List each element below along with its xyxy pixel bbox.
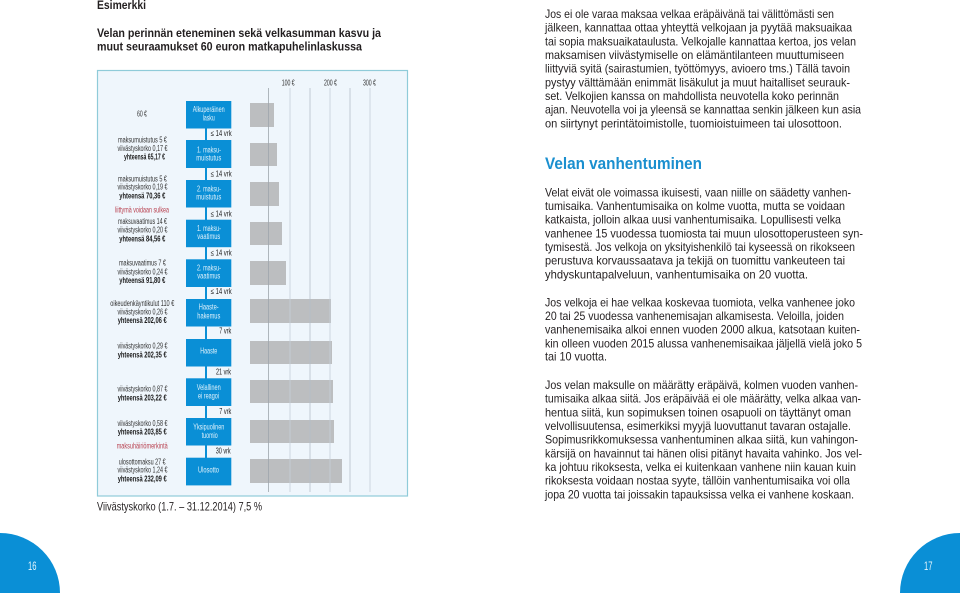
text block: start of limitation period: hentua siitä, kun sopimuksen toinen osapuoli on täyttänyt oman <box>545 405 851 419</box>
chart grid lines <box>268 88 370 492</box>
text block: limitation periods: vanhenee 15 vuodessa tuomiosta tai muun ulosottoperusteen syn- <box>545 226 863 240</box>
time interval labels: 21 vrk <box>216 367 232 376</box>
text block: limitation periods: Velat eivät ole voimassa ikuisesti, vaan niille on säädetty vanhen- <box>545 185 851 199</box>
text block: limitation periods: tumisaika. Vanhentumisaika on kolme vuotta, mutta se voidaan <box>545 199 845 213</box>
cost breakdown labels: oikeudenkäyntikulut 110 € <box>110 299 175 308</box>
time interval labels: ≤ 14 vrk <box>211 129 232 138</box>
text block: start of limitation period <box>544 378 862 501</box>
process step labels: vaatimus <box>197 232 220 241</box>
text block: intro paragraph: jälkeen, kannattaa ottaa yhteyttä velkojaan ja pyytää maksuaikaa <box>544 21 852 35</box>
page number badge: 17: 17 <box>924 561 932 573</box>
cost breakdown labels: maksumuistutus 5 € <box>118 136 167 145</box>
text block: start of limitation period: Sopimusrikkomuksessa vanhentuminen alkaa siitä, kun vahingon- <box>545 433 858 447</box>
text block: intro paragraph: tai sopia maksuaikataulusta. Velkojalle kannattaa kertoa, jos velan <box>545 34 856 48</box>
footnote: interest rate: Viivästyskorko (1.7. – 31.12.2014) 7,5 % <box>97 500 262 514</box>
cost breakdown labels: yhteensä 202,35 € <box>118 350 167 359</box>
page number badge: 16 <box>0 533 60 593</box>
cost breakdown labels: liittymä voidaan sulkea <box>115 206 169 215</box>
bar chart: debt amount per step <box>250 103 342 483</box>
cost breakdown labels: viivästyskorko 1,24 € <box>118 466 168 475</box>
cost breakdown labels: viivästyskorko 0,19 € <box>118 183 168 192</box>
text block: start of limitation period: ka johtuu rikoksesta, velka ei kuitenkaan vanhene niin kauan kuin <box>545 460 856 474</box>
cost breakdown labels: maksuhäiriömerkintä <box>117 442 168 451</box>
text block: start of limitation period: Jos velan maksulle on määrätty eräpäivä, kolmen vuoden vanhen- <box>545 378 858 392</box>
axis labels: 300 € <box>363 79 376 88</box>
process step labels: Haaste- <box>199 302 219 311</box>
text block: judgment limitation: kin olleen vuoden 2015 alussa vanhenemisaikaa jäljellä vielä joko 5 <box>545 336 862 350</box>
time interval labels <box>211 129 232 456</box>
time interval labels: 7 vrk <box>219 327 232 336</box>
cost breakdown labels: yhteensä 65,17 € <box>124 152 165 162</box>
cost breakdown labels: 60 € <box>137 110 147 119</box>
text block: judgment limitation <box>545 296 862 364</box>
process step labels: 1. maksu- <box>197 224 221 233</box>
process step labels: 1. maksu- <box>197 145 221 154</box>
connector line between process steps <box>205 128 207 458</box>
cost breakdown labels: viivästyskorko 0,29 € <box>118 342 168 351</box>
text block: judgment limitation: vanhenemisaika alkoi ennen vuoden 2000 alkua, katsotaan kuiten- <box>545 323 860 337</box>
cost breakdown labels: yhteensä 203,22 € <box>118 393 167 402</box>
process step labels: tuomio <box>202 431 218 440</box>
text block: intro paragraph: ajan. Neuvotella voi ja yleensä se kannattaa senkin jälkeen kun asia <box>545 103 861 117</box>
text block: judgment limitation: tai 10 vuotta. <box>545 350 607 364</box>
text block: intro paragraph: on siirtynyt perintätoimistolle, tuomioistuimeen tai ulosottoon. <box>545 116 842 130</box>
process step labels: 2. maksu- <box>197 184 221 193</box>
cost breakdown labels <box>110 110 175 483</box>
heading: Velan vanhentuminen: Velan vanhentuminen <box>545 154 702 173</box>
cost breakdown labels: viivästyskorko 0,20 € <box>118 226 168 235</box>
text block: judgment limitation: 20 tai 25 vuodessa vanhenemisajan alkamisesta. Veloilla, joiden <box>545 309 844 323</box>
text block: intro paragraph: maksamisen viivästymiselle on elämäntilanteen muuttumiseen <box>545 48 844 62</box>
text block: start of limitation period: tumisaika alkaa siitä. Jos eräpäivää ei ole määrätty, velka alkaa van- <box>545 392 861 406</box>
cost breakdown labels: ulosottomaksu 27 € <box>119 457 166 466</box>
time interval labels: ≤ 14 vrk <box>211 249 232 258</box>
panel: debt progression chart <box>98 70 408 496</box>
text block: limitation periods <box>545 185 863 281</box>
time interval labels: 30 vrk <box>216 447 231 456</box>
axis labels: 200 € <box>324 79 337 88</box>
process step labels: 2. maksu- <box>197 264 221 273</box>
time interval labels: ≤ 14 vrk <box>211 170 232 179</box>
process step labels: ei reagoi <box>198 391 219 400</box>
cost breakdown labels: maksuvaatimus 7 € <box>119 259 166 268</box>
cost breakdown labels: yhteensä 84,56 € <box>119 234 166 243</box>
text block: intro paragraph: liittyviä syitä (sairastumien, työttömyys, avioero tms.) Tällä tavoin <box>545 62 850 76</box>
cost breakdown labels: viivästyskorko 0,58 € <box>118 419 168 428</box>
cost breakdown labels: yhteensä 91,80 € <box>119 276 166 285</box>
process step labels: hakemus <box>197 311 220 320</box>
process step boxes <box>186 101 231 485</box>
cost breakdown labels: viivästyskorko 0,24 € <box>118 267 168 276</box>
text block: intro paragraph: Jos ei ole varaa maksaa velkaa eräpäivänä tai välittömästi sen <box>545 7 834 21</box>
axis labels <box>282 79 376 88</box>
cost breakdown labels: yhteensä 232,09 € <box>118 474 167 483</box>
text block: intro paragraph <box>544 7 861 130</box>
time interval labels: ≤ 14 vrk <box>211 209 232 218</box>
process step labels: vaatimus <box>197 272 220 281</box>
text block: start of limitation period: kärsijä on havainnut tai hänen olisi pitänyt havaita vahinko. Jos vel- <box>545 446 862 460</box>
page number badge: 16: 16 <box>28 561 36 573</box>
text block: start of limitation period: jopa 20 vuotta tai joissakin tapauksissa velka ei vanhene koskaan. <box>544 487 854 501</box>
text block: limitation periods: katkaista, jolloin alkaa uusi vanhentumisaika. Lopullisesti velka <box>545 213 841 227</box>
process step labels: lasku <box>203 114 215 123</box>
process step labels: muistutus <box>196 153 221 162</box>
chart title: Velan perinnän eteneminen sekä velkasumman kasvu ja <box>97 26 381 40</box>
cost breakdown labels: yhteensä 202,06 € <box>118 316 167 325</box>
page number badge: 17 <box>900 533 960 593</box>
cost breakdown labels: maksumuistutus 5 € <box>118 174 167 183</box>
process step labels: Velallinen <box>197 383 221 392</box>
cost breakdown labels: maksuvaatimus 14 € <box>118 217 167 226</box>
process step labels: Ulosotto <box>198 465 219 474</box>
cost breakdown labels: viivästyskorko 0,26 € <box>118 307 168 316</box>
process step labels: Haaste <box>200 347 218 356</box>
time interval labels: ≤ 14 vrk <box>211 287 232 296</box>
text block: limitation periods: yhdyskuntapalveluun, vanhentumisaika on 20 vuotta. <box>545 267 808 281</box>
text block: start of limitation period: velvollisuutensa, esimerkiksi myyjä luovuttanut tavaran ostajalle. <box>545 419 851 433</box>
cost breakdown labels: yhteensä 70,36 € <box>119 191 166 200</box>
process step labels: Alkuperäinen <box>193 105 225 114</box>
process step labels: Yksipuolinen <box>193 423 224 432</box>
axis labels: 100 € <box>282 79 295 88</box>
process step labels <box>193 105 225 474</box>
text block: limitation periods: tymisestä. Jos velkoja on yksityishenkilö tai kyseessä on rikokseen <box>545 240 855 254</box>
chart title <box>97 26 381 54</box>
cost breakdown labels: viivästyskorko 0,87 € <box>118 385 168 394</box>
time interval labels: 7 vrk <box>219 407 232 416</box>
text block: limitation periods: perustuva korvaussaatava ja tekijä on tuomittu vankeuteen tai <box>545 254 845 268</box>
text block: start of limitation period: rikoksesta voidaan nostaa syyte, tällöin vanhentumisaika voi olla <box>545 474 850 488</box>
text block: judgment limitation: Jos velkoja ei hae velkaa koskevaa tuomiota, velka vanhenee joko <box>545 296 855 310</box>
cost breakdown labels: viivästyskorko 0,17 € <box>118 144 168 153</box>
text block: intro paragraph: set. Velkojien kanssa on mahdollista neuvotella koko perinnän <box>545 89 839 103</box>
cost breakdown labels: yhteensä 203,85 € <box>118 428 167 437</box>
chart title: muut seuraamukset 60 euron matkapuhelinlaskussa <box>97 40 362 54</box>
text block: intro paragraph: pystyy välttämään enimmät lisäkulut ja muut haitalliset seurauk- <box>545 75 850 89</box>
process step labels: muistutus <box>196 193 221 202</box>
